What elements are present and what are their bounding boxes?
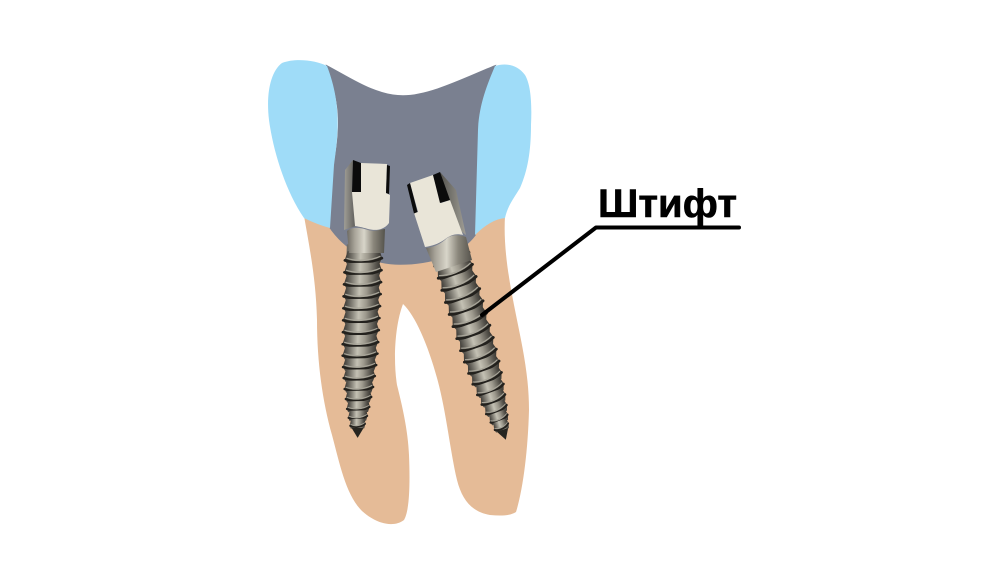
left enamel <box>268 60 338 228</box>
label: Штифт <box>598 182 737 226</box>
right pin <box>407 172 529 446</box>
core dentin <box>327 66 495 264</box>
leader line <box>482 228 739 315</box>
right enamel <box>475 65 531 235</box>
root dentin <box>304 150 529 524</box>
left pin <box>339 160 390 439</box>
